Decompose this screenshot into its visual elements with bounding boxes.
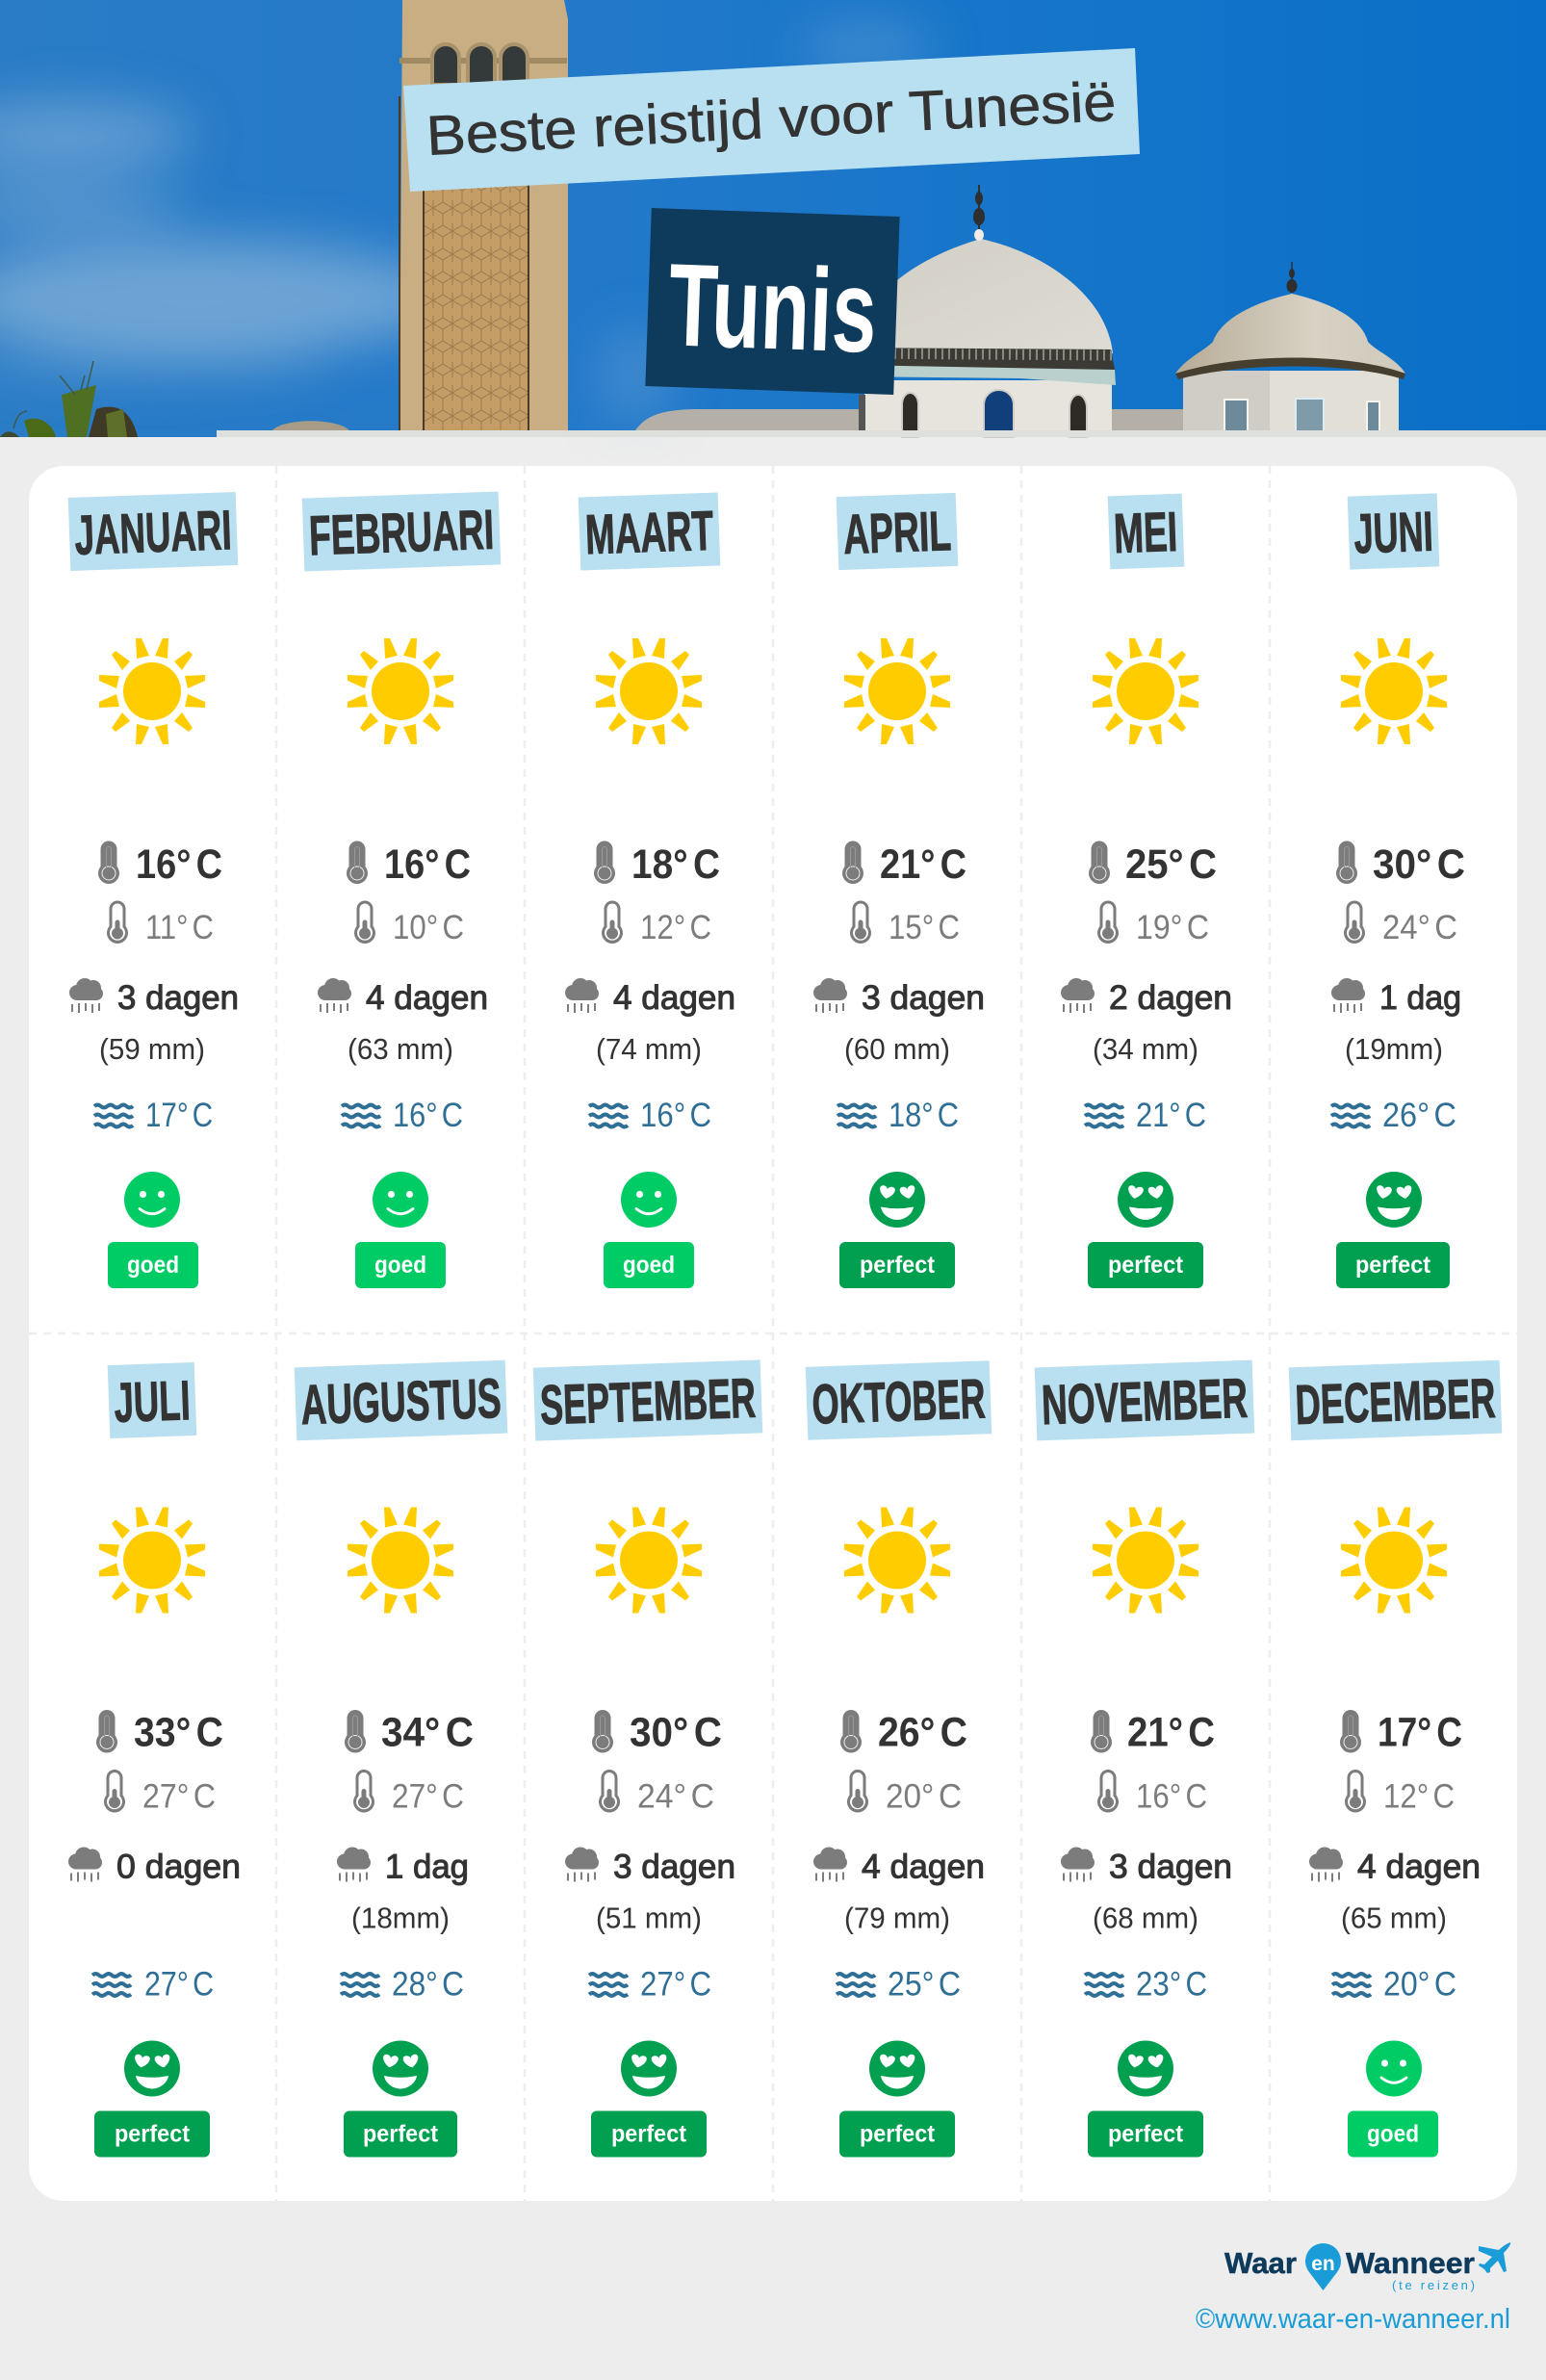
rating label: perfect	[1108, 2120, 1184, 2147]
rain days	[565, 978, 735, 1017]
rating label: goed	[1367, 2120, 1419, 2147]
rain days: 0 dagen	[116, 1849, 241, 1885]
max temperature: 26° C	[878, 1710, 967, 1756]
month heading	[302, 491, 501, 572]
sea temperature	[342, 1097, 463, 1134]
icon: sun	[1093, 638, 1198, 744]
rating label: perfect	[860, 2120, 936, 2147]
hero photo: mosque and sky	[0, 0, 1546, 437]
rain days	[813, 978, 985, 1017]
panel: mei	[1061, 494, 1232, 1288]
sea temperature	[837, 1966, 961, 2003]
min temperature	[1097, 901, 1209, 946]
month heading: SEPTEMBER	[539, 1367, 757, 1436]
city label: Tunis	[645, 208, 900, 395]
rating smiley	[373, 2041, 428, 2097]
max temperature	[1336, 841, 1465, 888]
rating label: perfect	[611, 2120, 687, 2147]
rainfall: (51 mm)	[596, 1901, 702, 1935]
rain days: 1 dag	[1379, 979, 1461, 1017]
rainfall: (34 mm)	[1093, 1032, 1198, 1066]
rain days	[813, 1847, 985, 1885]
min temperature: 24° C	[637, 1777, 714, 1816]
row 2: juli to december	[68, 1359, 1502, 2157]
icon: sun	[99, 638, 205, 744]
rating label	[344, 2110, 457, 2157]
max temperature	[347, 841, 471, 888]
panel: december	[1289, 1360, 1502, 2157]
min temperature	[1345, 1770, 1455, 1816]
max temperature: 21° C	[880, 841, 966, 888]
month heading: APRIL	[842, 500, 952, 566]
icon: map pin: en	[1311, 2253, 1335, 2275]
rain days: 4 dagen	[613, 979, 735, 1017]
sea temperature: 18° C	[889, 1097, 959, 1134]
max temperature	[840, 1710, 967, 1756]
min temperature	[107, 901, 214, 946]
icon: sun	[1341, 1508, 1447, 1614]
month heading	[837, 493, 958, 570]
month heading: MAART	[584, 500, 714, 566]
min temperature: 11° C	[145, 909, 214, 946]
rating label	[94, 2110, 210, 2157]
rating label: perfect	[1355, 1252, 1431, 1279]
rainfall: (74 mm)	[596, 1032, 702, 1066]
rain days	[337, 1847, 469, 1885]
month heading	[108, 1362, 196, 1438]
rain days: 4 dagen	[366, 979, 488, 1017]
rating smiley	[869, 1172, 925, 1228]
min temperature	[1097, 1770, 1207, 1816]
large dome	[847, 185, 1116, 437]
max temperature	[1091, 1710, 1215, 1756]
rating label	[591, 2110, 707, 2157]
rainfall: (19mm)	[1345, 1032, 1443, 1066]
rating smiley	[869, 2041, 925, 2097]
month heading: MEI	[1113, 501, 1178, 565]
month heading	[533, 1359, 762, 1441]
rating label	[108, 1242, 198, 1288]
max temperature: 34° C	[381, 1710, 474, 1756]
panel: februari	[302, 491, 501, 1288]
sea temperature: 20° C	[1383, 1966, 1456, 2003]
low roofs	[635, 409, 1263, 430]
rating label	[839, 2110, 955, 2157]
month heading	[1348, 493, 1439, 570]
min temperature: 20° C	[886, 1777, 962, 1816]
rating smiley	[1366, 2041, 1422, 2097]
min temperature	[354, 901, 464, 946]
logo: Waar en Wanneer: (te reizen)	[1392, 2278, 1475, 2292]
panel: november	[1035, 1360, 1254, 2157]
icon: map pin	[1305, 2243, 1341, 2290]
rainfall: (68 mm)	[1093, 1901, 1198, 1935]
rain days	[1331, 978, 1461, 1017]
rainfall: (18mm)	[351, 1901, 450, 1935]
rain days: 3 dagen	[1109, 1849, 1232, 1885]
min temperature	[850, 901, 960, 946]
min temperature: 10° C	[393, 909, 464, 946]
rainfall: (63 mm)	[348, 1032, 453, 1066]
month heading: FEBRUARI	[308, 499, 495, 567]
rating label: perfect	[115, 2120, 191, 2147]
min temperature: 24° C	[1382, 909, 1457, 946]
panel: juli	[68, 1362, 241, 2157]
rain days: 3 dagen	[613, 1849, 735, 1885]
max temperature: 30° C	[630, 1710, 722, 1756]
max temperature	[96, 1710, 223, 1756]
row 1: januari to juni	[68, 491, 1465, 1288]
month heading: JULI	[113, 1369, 192, 1435]
max temperature	[345, 1710, 474, 1756]
rain days: 2 dagen	[1109, 979, 1232, 1017]
icon: sun	[348, 638, 453, 744]
rating label	[839, 1242, 955, 1288]
rain days: 3 dagen	[117, 979, 239, 1017]
tower	[399, 0, 568, 437]
sea temperature: 27° C	[144, 1966, 214, 2003]
rain days	[1061, 978, 1232, 1017]
rainfall: (65 mm)	[1341, 1901, 1447, 1935]
sea temperature: 23° C	[1136, 1966, 1207, 2003]
sea temperature	[1332, 1966, 1456, 2003]
icon: sun	[596, 1508, 702, 1614]
month heading	[295, 1360, 507, 1440]
month heading: OKTOBER	[811, 1367, 987, 1436]
icon: sun	[99, 1508, 205, 1614]
max temperature: 16° C	[136, 841, 222, 888]
rain days	[68, 1847, 241, 1885]
sea temperature	[837, 1097, 959, 1134]
panel: augustus	[295, 1360, 507, 2157]
logo: Waar en Wanneer	[1224, 2242, 1510, 2292]
rating smiley	[124, 2041, 180, 2097]
rain days	[69, 978, 239, 1017]
icon: plane	[1479, 2242, 1510, 2273]
rating label	[1348, 2110, 1438, 2157]
rating smiley	[1118, 1172, 1173, 1228]
rating label: perfect	[363, 2120, 439, 2147]
sea temperature	[589, 1097, 711, 1134]
min temperature: 15° C	[889, 909, 960, 946]
icon: sun	[844, 1508, 950, 1614]
sea temperature	[341, 1966, 464, 2003]
rain days: 4 dagen	[1357, 1849, 1481, 1885]
max temperature: 33° C	[134, 1710, 223, 1756]
month heading	[806, 1360, 992, 1440]
rating label: goed	[127, 1252, 179, 1279]
sea temperature: 16° C	[640, 1097, 711, 1134]
rain days: 1 dag	[385, 1849, 469, 1885]
sea temperature: 25° C	[888, 1966, 961, 2003]
month heading	[68, 492, 238, 571]
max temperature	[592, 1710, 722, 1756]
rain days	[565, 1847, 735, 1885]
sea temperature	[589, 1966, 711, 2003]
max temperature: 16° C	[384, 841, 471, 888]
sea temperature	[1085, 1097, 1206, 1134]
rain days: 3 dagen	[862, 979, 985, 1017]
min temperature: 12° C	[640, 909, 711, 946]
min temperature	[847, 1770, 962, 1816]
panel: oktober	[806, 1360, 992, 2157]
panel: januari	[68, 492, 239, 1288]
logo: Waar en Wanneer: Wanneer	[1346, 2246, 1475, 2280]
rain days	[1309, 1847, 1481, 1885]
panel: september	[533, 1359, 762, 2157]
rating smiley	[373, 1172, 428, 1228]
min temperature: 27° C	[142, 1777, 216, 1816]
rating label: perfect	[860, 1252, 936, 1279]
city name: Tunis	[666, 239, 879, 377]
rain days	[318, 978, 488, 1017]
panel: april	[813, 493, 985, 1288]
white wall strip	[217, 430, 1546, 437]
min temperature: 27° C	[392, 1777, 464, 1816]
max temperature: 30° C	[1373, 841, 1465, 888]
rating label	[604, 1242, 694, 1288]
sea temperature	[94, 1097, 213, 1134]
title banner	[403, 48, 1140, 192]
month heading: NOVEMBER	[1041, 1367, 1249, 1436]
rating smiley	[621, 1172, 677, 1228]
icon: sun	[1341, 638, 1447, 744]
sea temperature	[1331, 1097, 1456, 1134]
rainfall: (79 mm)	[844, 1901, 950, 1935]
sea temperature: 17° C	[145, 1097, 213, 1134]
min temperature	[602, 901, 711, 946]
panel: months card	[29, 466, 1517, 2201]
sea temperature: 27° C	[640, 1966, 711, 2003]
month heading	[1035, 1360, 1254, 1440]
month heading	[1108, 494, 1184, 569]
rating label: goed	[623, 1252, 675, 1279]
icon: sun	[596, 638, 702, 744]
palm	[0, 361, 138, 437]
rating label: perfect	[1108, 1252, 1184, 1279]
icon: sun	[1093, 1508, 1198, 1614]
rating smiley	[621, 2041, 677, 2097]
max temperature	[98, 841, 222, 888]
panel: juni	[1331, 493, 1465, 1288]
rainfall: (60 mm)	[844, 1032, 950, 1066]
rating smiley	[1118, 2041, 1173, 2097]
copyright url: ©www.waar-en-wanneer.nl	[1196, 2304, 1510, 2335]
min temperature: 16° C	[1136, 1777, 1207, 1816]
sea temperature: 21° C	[1136, 1097, 1206, 1134]
rating label: goed	[374, 1252, 426, 1279]
panel: maart	[565, 492, 735, 1288]
sea temperature: 16° C	[393, 1097, 463, 1134]
rating label	[355, 1242, 446, 1288]
max temperature: 25° C	[1125, 841, 1217, 888]
rating label	[1088, 2110, 1203, 2157]
rating label	[1336, 1242, 1450, 1288]
month heading: JANUARI	[73, 499, 233, 567]
min temperature: 12° C	[1383, 1777, 1455, 1816]
min temperature	[104, 1770, 216, 1816]
max temperature	[842, 841, 966, 888]
small dome	[1175, 262, 1405, 435]
min temperature	[353, 1770, 464, 1816]
max temperature: 21° C	[1127, 1710, 1215, 1756]
rain days	[1061, 1847, 1232, 1885]
rating smiley	[124, 1172, 180, 1228]
max temperature: 18° C	[631, 841, 720, 888]
month heading	[579, 492, 720, 571]
max temperature	[1089, 841, 1217, 888]
sea temperature: 28° C	[392, 1966, 464, 2003]
min temperature: 19° C	[1136, 909, 1209, 946]
icon: sun	[844, 638, 950, 744]
max temperature	[1340, 1710, 1462, 1756]
max temperature	[594, 841, 720, 888]
title: Beste reistijd voor Tunesië	[425, 70, 1118, 168]
min temperature	[599, 1770, 714, 1816]
sea temperature	[92, 1966, 214, 2003]
min temperature	[1344, 901, 1457, 946]
max temperature: 17° C	[1378, 1710, 1462, 1756]
month heading: JUNI	[1353, 501, 1434, 565]
sea temperature: 26° C	[1382, 1097, 1456, 1134]
logo: Waar en Wanneer: Waar	[1224, 2246, 1297, 2280]
sea temperature	[1085, 1966, 1207, 2003]
rating smiley	[1366, 1172, 1422, 1228]
month heading: AUGUSTUS	[299, 1367, 502, 1436]
rainfall: (59 mm)	[99, 1032, 205, 1066]
icon: sun	[348, 1508, 453, 1614]
rain days: 4 dagen	[862, 1849, 985, 1885]
rating label	[1088, 1242, 1203, 1288]
